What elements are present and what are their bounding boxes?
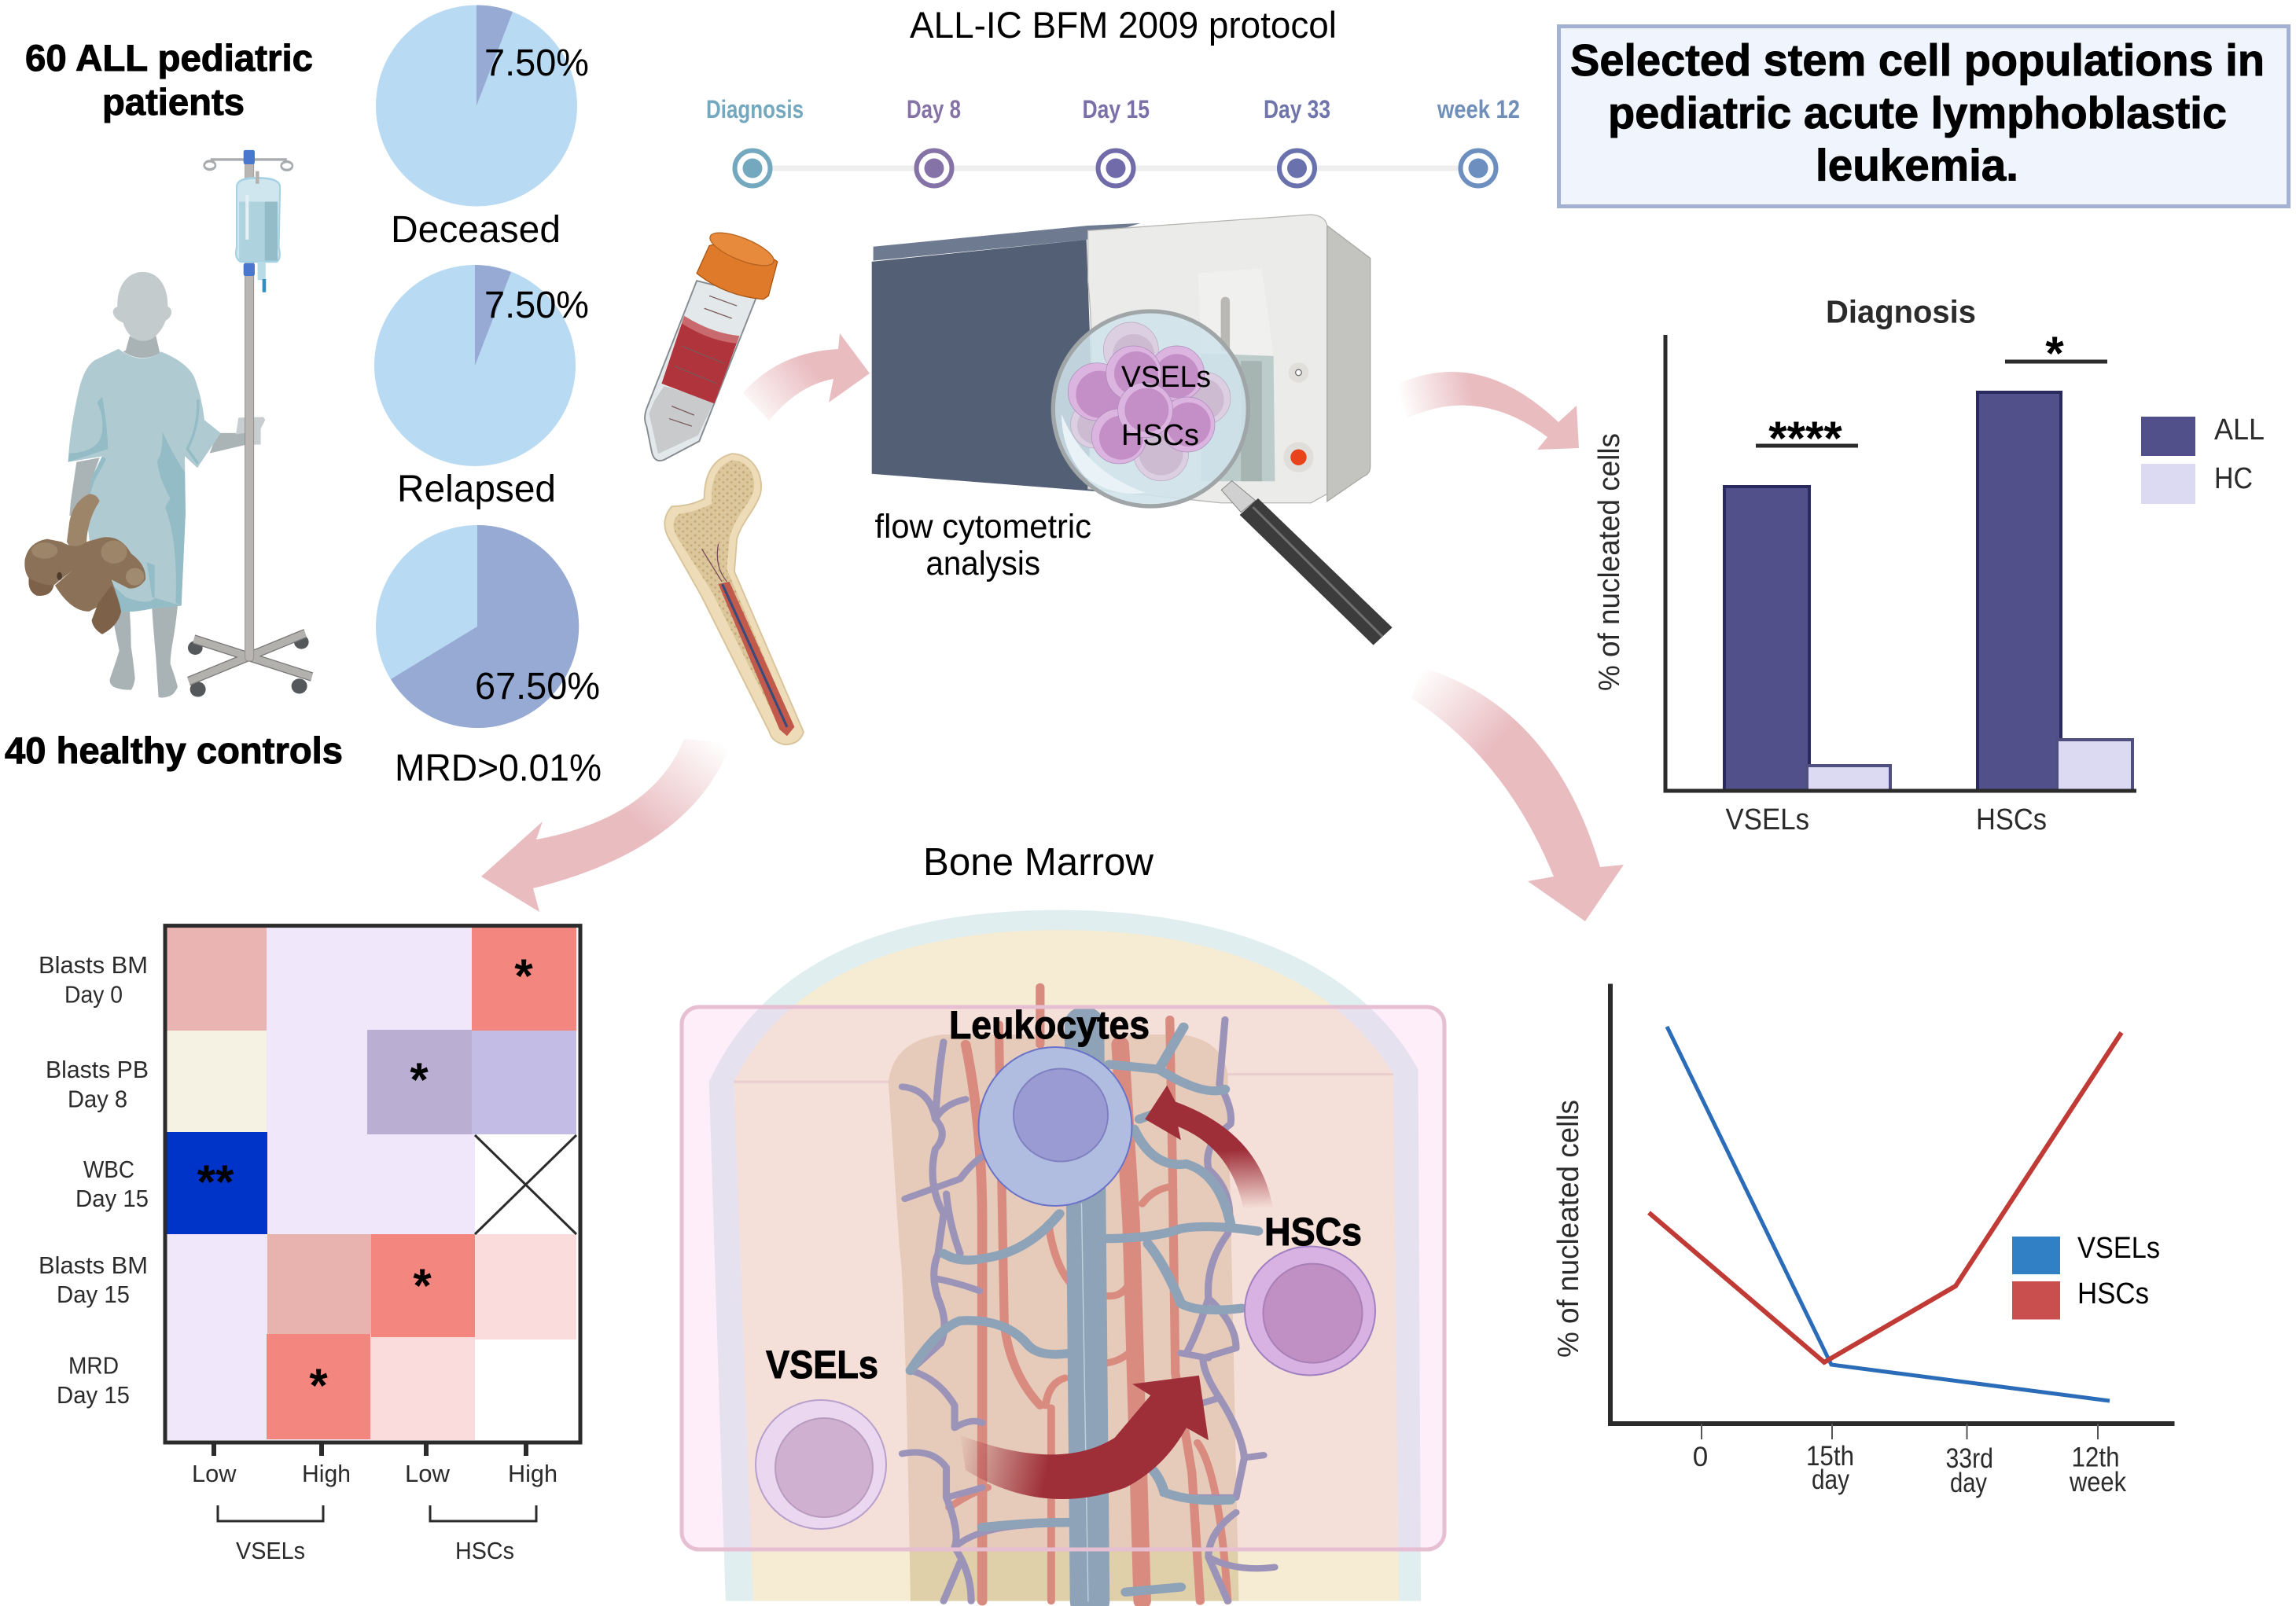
heading: patient cohort: 60 ALL pediatric — [25, 37, 313, 79]
line chart: day — [1812, 1465, 1849, 1495]
significance stars: * — [514, 950, 533, 1002]
significance stars — [197, 950, 533, 1412]
column axis: High — [302, 1460, 351, 1487]
legend: HSCs — [2077, 1277, 2149, 1310]
label: VSELs in lens: VSELs — [1121, 361, 1211, 394]
blood vessels — [902, 987, 1275, 1601]
line chart: week — [2069, 1467, 2126, 1498]
legend: VSELs — [2077, 1232, 2160, 1265]
series: HSCs — [1649, 1033, 2121, 1362]
heading: patient cohort: patients — [102, 81, 245, 123]
timepoint: day 8: Day 8 — [907, 95, 961, 123]
timepoint: day 33 — [1264, 95, 1330, 186]
label: Leukocytes: Leukocytes — [949, 1003, 1150, 1047]
arrow: cytometer to bar chart — [1396, 372, 1579, 450]
legend: HC — [2214, 462, 2253, 495]
bar chart: diagnosis: Diagnosis — [1826, 294, 1976, 330]
title box: Selected stem cell populations in — [1570, 35, 2265, 86]
label: flow cytometric analysis: flow cytometric — [874, 508, 1091, 546]
bars — [1724, 392, 2132, 791]
legend — [2141, 413, 2265, 504]
row labels: Day 15 — [57, 1381, 130, 1409]
bar chart: diagnosis: % of nucleated cells — [1593, 433, 1626, 691]
label: VSELs: VSELs — [766, 1343, 878, 1387]
pie chart: MRD: MRD>0.01% — [395, 748, 602, 789]
pie chart: deceased: Deceased — [391, 209, 561, 251]
arrow: cytometer to line chart — [1411, 667, 1624, 921]
significance markers — [1756, 327, 2107, 465]
icon: sample tube — [645, 226, 778, 461]
bar chart: diagnosis: VSELs — [1725, 803, 1809, 836]
significance stars: * — [410, 1053, 429, 1106]
column axis: VSELs — [236, 1537, 305, 1564]
row labels: Day 0 — [64, 981, 123, 1009]
icon: IV pole with fluid bag — [188, 150, 312, 697]
cell: HSC — [1245, 1247, 1375, 1376]
timepoint: day 8 — [907, 95, 961, 186]
arrow: HSCs to leukocytes — [1145, 1086, 1274, 1214]
column axis: HSCs — [455, 1537, 514, 1564]
label: healthy controls: 40 healthy controls — [5, 729, 343, 771]
timeline — [706, 95, 1520, 186]
significance markers: **** — [1768, 412, 1842, 465]
line chart — [1552, 984, 2175, 1498]
title box: leukemia. — [1816, 140, 2018, 190]
timepoint: day 15 — [1082, 95, 1150, 186]
icon: femur bone — [664, 454, 804, 744]
legend: ALL — [2214, 413, 2265, 447]
arrow: bone marrow to heatmap — [481, 739, 731, 912]
line chart: % of nucleated cells — [1552, 1100, 1585, 1358]
line chart: day — [1950, 1468, 1987, 1498]
column axis: Low — [192, 1460, 237, 1487]
title box: pediatric acute lymphoblastic — [1608, 88, 2227, 138]
line chart: 15th — [1806, 1441, 1854, 1472]
line chart: 0 — [1693, 1442, 1708, 1472]
title box — [1558, 27, 2288, 206]
line chart: 12th — [2071, 1442, 2120, 1473]
heatmap — [39, 926, 580, 1564]
cell: VSEL — [756, 1400, 886, 1529]
row labels: Blasts BM — [39, 1251, 148, 1279]
pie chart: relapsed: 7.50% — [484, 285, 589, 326]
timepoint: week 12: week 12 — [1437, 95, 1520, 123]
row labels: Day 8 — [68, 1085, 127, 1113]
label: flow cytometric analysis: analysis — [926, 545, 1040, 582]
line chart: 33rd — [1945, 1443, 1993, 1474]
bar chart: diagnosis — [1593, 294, 2265, 836]
bar chart: diagnosis: HSCs — [1976, 803, 2047, 836]
row labels — [39, 951, 149, 1409]
icon: child patient in gown with teddy bear — [24, 272, 265, 697]
icon: magnifier with cells — [1053, 311, 1393, 645]
series: VSELs — [1667, 1027, 2110, 1401]
label: HSCs: HSCs — [1264, 1210, 1362, 1254]
heading: patient cohort — [25, 37, 313, 123]
timepoint: day 15: Day 15 — [1082, 95, 1150, 123]
row labels: Day 15 — [75, 1185, 149, 1212]
pie chart: MRD: 67.50% — [475, 666, 600, 707]
timepoint: diagnosis: Diagnosis — [706, 95, 804, 123]
significance stars: * — [413, 1259, 432, 1312]
heatmap cells — [167, 928, 576, 1440]
bone cross-section — [709, 910, 1421, 1601]
row labels: Day 15 — [57, 1281, 130, 1308]
icon: flow cytometer — [872, 215, 1371, 503]
significance markers: * — [2045, 327, 2064, 380]
label: HSCs in lens: HSCs — [1121, 419, 1199, 452]
pie chart: relapsed: Relapsed — [397, 469, 556, 510]
heading: protocol: ALL-IC BFM 2009 protocol — [910, 4, 1337, 46]
row labels: WBC — [83, 1156, 134, 1183]
timepoint: week 12 — [1437, 95, 1520, 186]
pie chart: deceased: 7.50% — [484, 42, 589, 84]
row labels: Blasts PB — [46, 1056, 149, 1083]
row labels: Blasts BM — [39, 951, 148, 979]
panel: bone marrow niche — [682, 910, 1444, 1601]
arrow: VSELs to HSCs — [960, 1376, 1209, 1499]
column axis: Low — [405, 1460, 451, 1487]
pie chart: relapsed — [374, 265, 589, 510]
pie chart: deceased — [376, 5, 589, 251]
timepoint: day 33: Day 33 — [1264, 95, 1330, 123]
timepoint: diagnosis — [706, 95, 804, 186]
legend — [2012, 1232, 2160, 1319]
significance stars: ** — [197, 1156, 234, 1208]
arrow: sample to cytometer — [743, 333, 870, 421]
pie chart: MRD — [376, 525, 602, 789]
significance stars: * — [309, 1359, 328, 1412]
heading: bone marrow: Bone Marrow — [923, 841, 1154, 884]
column axis — [192, 1442, 557, 1564]
column axis: High — [508, 1460, 557, 1487]
highlighted region fill — [682, 1007, 1444, 1549]
highlighted region border — [682, 1007, 1444, 1549]
row labels: MRD — [68, 1352, 119, 1380]
cell: leukocyte — [978, 1047, 1132, 1206]
label: flow cytometric analysis — [874, 508, 1091, 582]
